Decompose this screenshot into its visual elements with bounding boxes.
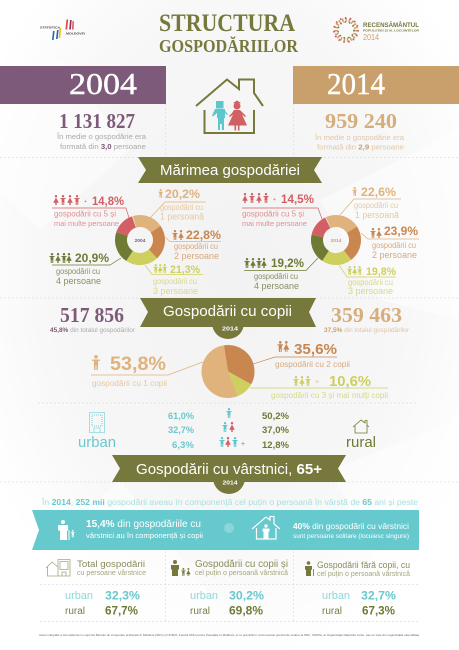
icon and label: urban	[78, 412, 116, 451]
stat: 2004 households with children: 45,8% din totalul gospodărilor	[50, 327, 136, 334]
stat: 2004 households: formată din 3,0 persoane	[60, 142, 146, 151]
icon: house and building	[46, 560, 70, 576]
callout: 2014 four persons	[244, 257, 318, 291]
callout: 2004 four persons: 4 persoane	[56, 276, 101, 286]
callout: 2014 two persons: 23,9%	[384, 224, 418, 238]
logo: Recensământul: 2014	[363, 33, 379, 42]
heading: Gospodării cu copii: 2014	[222, 326, 239, 332]
callout: three or more children	[250, 374, 388, 400]
stat: 2004 households: În medie o gospodărie era	[56, 132, 147, 141]
callout: 2004 five or more persons: gospodării cu 5 și	[54, 210, 116, 219]
logo: Statistica Moldovei: STATISTICA	[40, 26, 61, 30]
callout: 2004 one person: gospodării cu	[160, 203, 203, 212]
panel: households with children and elderly: 69,8%	[229, 604, 263, 618]
text: elderly intro: În 2014, 252 mii gospodării aveau în componență cel puțin o persoană în vârstă de 65 ani și peste	[41, 497, 418, 507]
stat: 2014 households with children: 37,5% din totalul gospodărilor	[324, 327, 410, 334]
icon and label: rural: rural	[346, 434, 376, 451]
text: 40%	[293, 521, 409, 540]
text: 15,4%: 15,4% din gospodăriile cu	[86, 519, 201, 530]
callout: two children	[253, 341, 350, 369]
table: urban vs rural children	[168, 408, 290, 450]
heading: Mărimea gospodăriei: Mărimea gospodăriei	[160, 162, 300, 179]
stat: 2004 households	[56, 109, 147, 151]
panel: total households with elderly: 32,3%	[105, 588, 140, 602]
callout: two children: gospodării cu 2 copii	[275, 359, 350, 369]
stat: 2014 households: formată din 2,9 persoane	[317, 142, 404, 152]
logo: Statistica Moldovei: MOLDOVEI	[66, 32, 85, 36]
stat: 2014 households with children: 359 463	[331, 303, 402, 327]
callout: 2004 three persons: 21,3%	[170, 264, 201, 276]
stat: 2014 households: 959 240	[325, 109, 397, 133]
chart: children pie	[213, 356, 243, 387]
panel: households without children with elderly: rural	[322, 606, 342, 617]
logo: Recensământul: POPULAȚIEI ȘI AL LOCUINȚELOR	[363, 28, 420, 32]
panel: households with children and elderly: cel puțin o persoană vârstnică	[195, 570, 288, 577]
panel: households without children with elderly: urban	[322, 590, 350, 602]
panel: households without children with elderly: 32,7%	[361, 588, 396, 602]
callout: 2014 four persons: gospodării cu	[254, 272, 298, 281]
panel: 2014 banner	[293, 66, 459, 104]
table: urban vs rural children: 6,3%	[172, 440, 195, 450]
stat: 2014 households	[314, 109, 405, 152]
title: STRUCTURA	[159, 10, 295, 37]
callout: 2014 one person	[340, 185, 401, 220]
callout: three or more children: +	[315, 379, 319, 386]
heading: Gospodării cu vârstnici: 2014	[222, 480, 239, 486]
callout: three or more children: 10,6%	[329, 374, 371, 390]
chart: donut 2014	[311, 215, 361, 265]
icon: elder in house	[252, 516, 280, 539]
icon and label: rural	[346, 420, 376, 451]
callout: one child: gospodării cu 1 copii	[92, 378, 167, 388]
label: donut 2014 year: 2014	[330, 238, 342, 243]
panel: households with children and elderly: urban	[190, 590, 218, 602]
stat: 2004 households: 1 131 827	[59, 109, 135, 133]
table: urban vs rural children: 32,7%	[168, 425, 195, 435]
stat: 2014 households with children	[324, 303, 410, 334]
callout: 2004 four persons: 20,9%	[75, 251, 109, 265]
callout: 2004 one person	[150, 187, 206, 222]
panel: 2004 banner: 2004	[69, 66, 138, 101]
heading: Gospodării cu vârstnici: Gospodării cu vârstnici, 65+	[136, 461, 322, 478]
panel: households with children and elderly: Gospodării cu copii și	[195, 559, 288, 570]
chart: donut 2004	[116, 216, 164, 264]
panel: households without children with elderly: 67,3%	[362, 604, 395, 618]
icon: elder with child	[58, 520, 75, 540]
panel: total households with elderly	[46, 559, 146, 618]
panel: households with children and elderly: rural	[190, 606, 210, 617]
callout: 2004 five or more persons: 14,8%	[92, 196, 124, 208]
panel: households without children with elderly: cel puțin o persoană vârstnică	[317, 571, 410, 578]
callout: 2004 two persons: gospodării cu	[174, 242, 218, 251]
callout: 2014 three persons: 19,8%	[366, 266, 397, 278]
panel: teal banner	[32, 510, 419, 550]
text: 40%: sunt persoane solitare (locuiesc singure)	[293, 533, 409, 540]
callout: 2014 one person: 22,6%	[361, 185, 396, 199]
callout: 2014 five or more persons: +	[273, 197, 276, 203]
title	[159, 10, 298, 56]
title: GOSPODĂRIILOR	[159, 36, 298, 56]
table: urban vs rural children: 50,2%	[262, 411, 290, 421]
callout: 2014 two persons	[361, 224, 419, 260]
text: 15,4%	[86, 519, 203, 540]
callout: 2014 five or more persons: gospodării cu 5 și	[242, 210, 304, 219]
callout: 2004 four persons: gospodării cu	[56, 267, 100, 276]
footnote: Acest infografic a fost elaborat cu suportul Biroului de Cooperare al Elveției în Moldova (SDC) și UNFPA, Fondul ONU pentru Populație în Moldova, și nu prezintă în mod necesar punctul de vedere al SDC, UNFPA, al Organizației Națiunilor Unite, sau ori care din organizațiile sale afiliate.	[39, 633, 420, 637]
callout: 2014 two persons: gospodării cu	[372, 241, 416, 250]
table: urban vs rural children: 37,0%	[262, 425, 290, 435]
callout: 2004 two persons	[165, 228, 221, 261]
logo: Statistica Moldovei	[40, 20, 85, 40]
panel: total households with elderly: urban	[65, 590, 93, 602]
text: 40%: 40% din gospodării cu vârstnici	[293, 521, 409, 531]
logo: Recensământul: RECENSĂMÂNTUL	[363, 20, 419, 29]
table: urban vs rural children: +	[241, 441, 245, 448]
panel: 2014 banner: 2014	[327, 66, 385, 101]
logo: Recensământul	[334, 18, 420, 42]
callout: 2014 five or more persons: mai multe persoane	[242, 219, 307, 228]
callout: 2014 three persons: 3 persoane	[348, 286, 393, 296]
callout: 2014 four persons: 4 persoane	[254, 281, 299, 291]
panel: 2004 banner	[0, 66, 166, 104]
callout: 2014 three persons	[339, 265, 397, 296]
icon: elder	[305, 561, 314, 576]
callout: 2004 three persons	[145, 264, 203, 296]
panel: total households with elderly: 67,7%	[105, 604, 138, 618]
callout: 2014 five or more persons: 14,5%	[281, 193, 315, 206]
panel: households without children with elderly	[305, 560, 410, 618]
callout: 2014 one person: gospodării cu	[354, 201, 398, 210]
label: donut 2004 year: 2004	[134, 238, 146, 243]
panel: total households with elderly: Total gospodării	[77, 559, 145, 570]
callout: 2014 one person: 1 persoană	[355, 210, 399, 220]
icon: elder with children	[171, 560, 191, 576]
stat: 2004 households with children	[50, 303, 136, 334]
panel: households with children and elderly: 30,2%	[229, 588, 264, 602]
panel: total households with elderly: rural	[65, 606, 85, 617]
callout: 2004 three persons: gospodării cu	[153, 277, 197, 286]
panel: total households with elderly: cu persoane vârstnice	[77, 570, 146, 577]
stat: 2014 households: În medie o gospodărie era	[314, 133, 405, 142]
heading: Mărimea gospodăriei	[138, 157, 322, 183]
callout: 2004 one person: 1 persoană	[160, 212, 204, 222]
callout: 2004 three persons: 3 persoane	[153, 286, 198, 296]
callout: 2004 two persons: 22,8%	[186, 228, 221, 242]
text: 15,4%: vârstnici au în componență și copii	[86, 531, 203, 540]
table: urban vs rural children: 61,0%	[168, 411, 195, 421]
stat: 2004 households with children: 517 856	[60, 303, 124, 327]
table: urban vs rural children: 12,8%	[262, 440, 290, 450]
heading: Gospodării cu vârstnici	[112, 455, 346, 494]
icon: house with family	[196, 80, 263, 133]
panel: households without children with elderly: Gospodării fără copii, cu	[317, 560, 410, 570]
callout: 2004 five or more persons	[52, 195, 129, 228]
callout: 2014 three persons: gospodării cu	[348, 278, 393, 287]
callout: one child: 53,8%	[110, 353, 166, 375]
callout: 2014 four persons: 19,2%	[271, 257, 305, 270]
callout: 2004 one person: 20,2%	[165, 187, 200, 201]
callout: two children: 35,6%	[294, 341, 337, 358]
icon and label: urban: urban	[78, 435, 116, 451]
callout: 2004 two persons: 2 persoane	[174, 251, 219, 261]
callout: 2004 five or more persons: +	[84, 199, 87, 205]
callout: 2004 four persons	[49, 251, 121, 286]
heading: Gospodării cu copii	[140, 298, 316, 339]
heading: Gospodării cu copii: Gospodării cu copii	[163, 303, 292, 320]
callout: one child	[91, 353, 203, 388]
callout: 2004 five or more persons: mai multe persoane	[54, 219, 119, 228]
callout: 2014 two persons: 2 persoane	[372, 250, 417, 260]
callout: 2014 five or more persons	[242, 193, 322, 228]
callout: three or more children: gospodării cu 3 și mai mulți copii	[271, 390, 388, 400]
panel: households with children and elderly	[171, 559, 288, 618]
